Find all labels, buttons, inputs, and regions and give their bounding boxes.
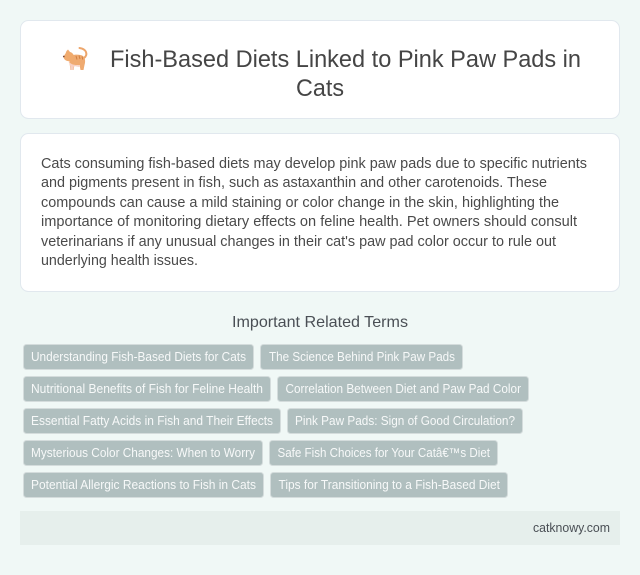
tag (260, 344, 462, 370)
panel: title (20, 20, 620, 118)
tag: Mysterious Color Changes: When to Worry (31, 446, 256, 460)
text block: description: compounds can cause a mild staining or color change in the skin, highlighting the (41, 195, 559, 211)
tag (24, 440, 262, 466)
heading line 1: Fish-Based Diets Linked to Pink Paw Pads in (110, 46, 581, 73)
text block: description: underlying health issues. (41, 253, 198, 269)
tag (24, 408, 280, 434)
tag (24, 376, 270, 402)
tag: Potential Allergic Reactions to Fish in Cats (31, 478, 256, 492)
icon: cat (63, 48, 86, 70)
tag (288, 408, 522, 434)
text block: description: Cats consuming fish-based diets may develop pink paw pads due to specific nutrients (41, 156, 587, 172)
tag (278, 376, 528, 402)
heading line 2: Cats (296, 75, 344, 102)
tag: Essential Fatty Acids in Fish and Their Effects (31, 414, 273, 428)
tag: Understanding Fish-Based Diets for Cats (31, 350, 246, 364)
tag (24, 344, 254, 370)
tag: The Science Behind Pink Paw Pads (269, 350, 455, 364)
tag: Nutritional Benefits of Fish for Feline Health (31, 382, 263, 396)
tag: Safe Fish Choices for Your Catâ€™s Diet (278, 446, 490, 460)
footer source: catknowy.com (533, 521, 610, 535)
tag (24, 472, 264, 498)
footer (20, 511, 620, 545)
tag: Tips for Transitioning to a Fish-Based Diet (278, 478, 500, 492)
tag: Correlation Between Diet and Paw Pad Color (286, 382, 521, 396)
tag list (24, 344, 528, 498)
panel: description (20, 134, 620, 292)
text block: description: veterinarians if any unusual changes in their cat's paw pad color occur to rule out (41, 234, 556, 250)
text block: description: and pigments present in fish, such as astaxanthin and other carotenoids. These (41, 175, 547, 191)
tag (270, 472, 508, 498)
text block: description (41, 156, 587, 269)
text block: description: importance of monitoring dietary effects on feline health. Pet owners should consult (41, 214, 577, 230)
tag: Pink Paw Pads: Sign of Good Circulation? (295, 414, 515, 428)
heading: important related terms: Important Related Terms (232, 314, 408, 331)
tag (270, 440, 498, 466)
